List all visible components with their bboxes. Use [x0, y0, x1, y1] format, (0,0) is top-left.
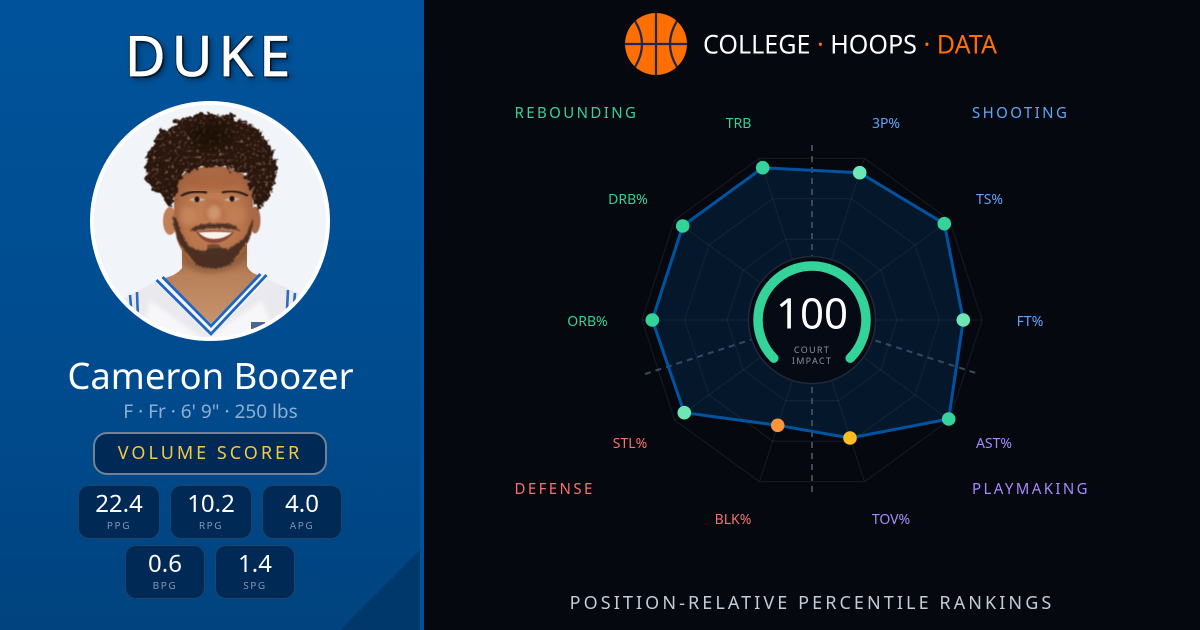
corner triangle	[340, 550, 420, 630]
cheek highlights	[180, 208, 194, 224]
category labels: SHOOTING	[972, 103, 1069, 123]
data points	[646, 161, 970, 445]
face	[174, 166, 253, 267]
header wordmark: COLLEGE · HOOPS · DATA	[703, 28, 998, 62]
player name: Cameron Boozer	[67, 350, 354, 400]
stat: RPG: 10.2	[187, 487, 235, 520]
panel: player card	[0, 0, 424, 630]
mouth	[196, 230, 234, 243]
court impact gauge: 100	[776, 284, 848, 342]
metric labels: STL%	[613, 434, 647, 453]
mustache	[190, 223, 240, 231]
jersey	[124, 279, 298, 337]
stat: APG: APG	[290, 518, 314, 532]
radar polygon	[652, 168, 963, 438]
category labels	[514, 103, 1090, 499]
metric labels: FT%	[1017, 312, 1043, 331]
archetype badge: VOLUME SCORER	[118, 441, 302, 465]
category labels: PLAYMAKING	[972, 479, 1090, 499]
stat: BPG: BPG	[153, 578, 177, 592]
stat: APG: 4.0	[285, 487, 319, 520]
nose shadow	[204, 201, 225, 220]
eyes	[189, 196, 240, 202]
court impact gauge	[748, 256, 876, 384]
stat: RPG	[170, 485, 252, 539]
panel: radar background	[424, 0, 1200, 630]
team name: DUKE	[125, 17, 296, 93]
metric labels	[567, 114, 1043, 529]
player details: F · Fr · 6' 9" · 250 lbs	[123, 398, 298, 424]
category labels: REBOUNDING	[514, 103, 638, 123]
neck	[165, 245, 258, 324]
stat: RPG: RPG	[199, 518, 223, 532]
metric labels: ORB%	[567, 312, 608, 331]
archetype badge	[93, 432, 327, 475]
stat: PPG	[78, 485, 160, 539]
section dividers	[645, 145, 979, 495]
category labels: DEFENSE	[514, 479, 595, 499]
court impact gauge: IMPACT	[792, 354, 832, 367]
stat: APG	[262, 485, 342, 539]
beard	[174, 218, 253, 268]
stat: SPG: 1.4	[238, 547, 272, 580]
eyebrows	[181, 192, 207, 196]
radar grid	[642, 158, 982, 482]
stat: PPG: PPG	[107, 518, 131, 532]
metric labels: BLK%	[715, 510, 751, 529]
metric labels: DRB%	[608, 190, 648, 209]
stat: SPG	[215, 545, 295, 599]
stat: BPG: 0.6	[148, 547, 182, 580]
metric labels: TRB	[726, 114, 751, 133]
stat: PPG: 22.4	[95, 487, 143, 520]
metric labels: 3P%	[872, 114, 900, 133]
player portrait	[90, 101, 330, 341]
metric labels: TS%	[976, 190, 1003, 209]
metric labels: AST%	[976, 434, 1012, 453]
footer caption: POSITION-RELATIVE PERCENTILE RANKINGS	[570, 591, 1054, 615]
court impact gauge: COURT	[794, 343, 830, 356]
hair	[145, 113, 278, 210]
jersey collar	[159, 276, 264, 330]
metric labels: TOV%	[872, 510, 910, 529]
stat: SPG: SPG	[243, 578, 267, 592]
soul patch	[206, 244, 220, 250]
ears	[163, 207, 177, 235]
stat: BPG	[125, 545, 205, 599]
logo: basketball	[625, 13, 687, 75]
